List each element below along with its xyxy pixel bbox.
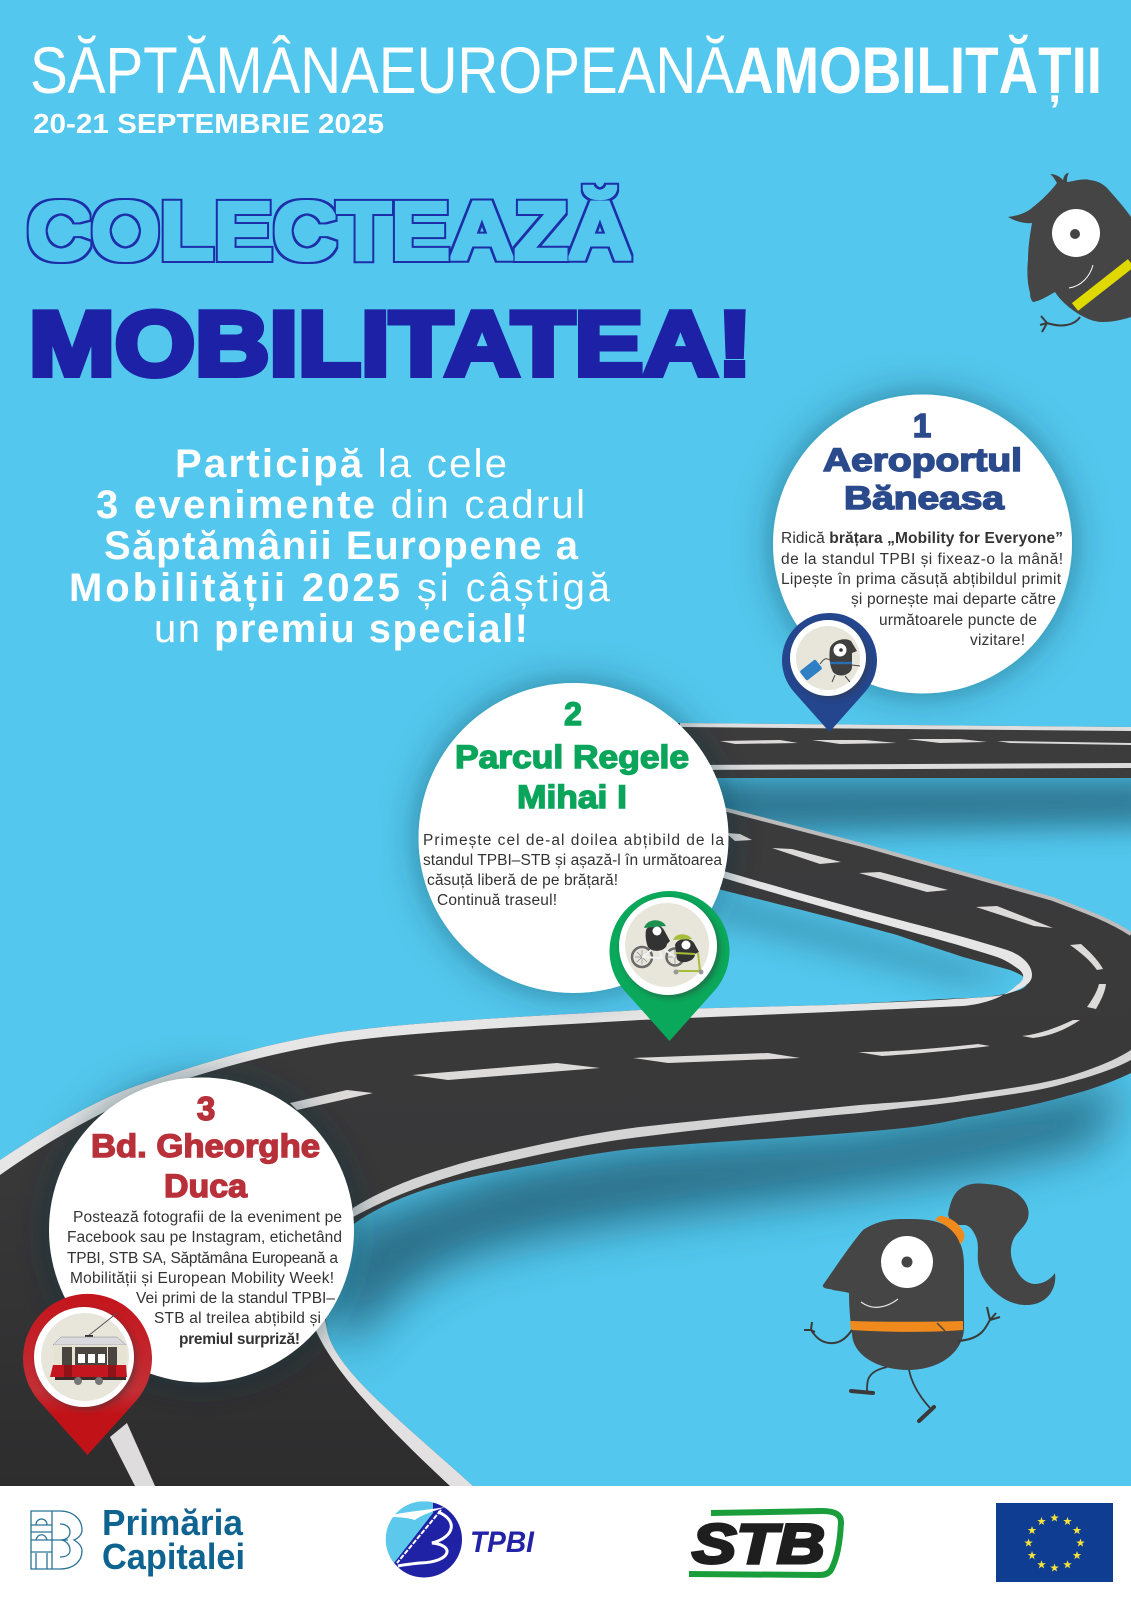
wordmark: Primăria: [102, 1502, 244, 1543]
intro paragraph: 3 evenimente din cadrul: [96, 483, 585, 527]
description: STB al treilea abțibild și: [154, 1310, 321, 1327]
footer band: [0, 1486, 1131, 1600]
description: următoarele puncte de: [879, 612, 1037, 629]
place name: Aeroportul: [823, 442, 1022, 478]
place name: Bd. Gheorghe: [91, 1128, 320, 1164]
pin with traveller mascot: [782, 613, 877, 732]
number: 3: [197, 1090, 215, 1127]
logo: Primăria Capitalei: [31, 1502, 245, 1577]
emblem: [31, 1511, 82, 1569]
place name: [823, 442, 1022, 516]
circle: [418, 683, 728, 993]
header title: SĂPTĂMÂNAEUROPEANĂ: [30, 33, 734, 107]
heading: Mobilitatea: MOBILITATEA!: [29, 294, 752, 395]
logo: TPBI: [386, 1501, 535, 1578]
intro paragraph: Participă la cele: [175, 442, 507, 486]
stop 2: Parcul Regele Mihai I: [418, 683, 730, 1041]
description: Primește cel de-al doilea abțibild de la: [423, 832, 724, 849]
intro paragraph: Mobilității 2025 și câștigă: [69, 566, 611, 610]
stop 3: Bd. Gheorghe Duca: [23, 1078, 354, 1455]
wordmark: STB: [692, 1512, 825, 1575]
shadows under road: [330, 778, 1131, 1350]
description: Postează fotografii de la eveniment pe: [73, 1209, 342, 1226]
date: 20-21 SEPTEMBRIE 2025: [33, 108, 384, 139]
description: Vei primi de la standul TPBI–: [136, 1290, 335, 1307]
place name: [91, 1128, 320, 1204]
pin with cyclists: [610, 891, 730, 1041]
mascot: bottom right with ponytail: [804, 1184, 1055, 1421]
pin with tram: [23, 1294, 152, 1455]
description: Ridică brățara „Mobility for Everyone”: [781, 530, 1063, 547]
wordmark: [102, 1502, 245, 1577]
description: [67, 1209, 342, 1348]
road surface: [0, 723, 1131, 1486]
mascot: top right with yellow belt: [1008, 173, 1131, 332]
description: Facebook sau pe Instagram, etichetând: [67, 1229, 342, 1246]
logo: EU flag: [996, 1503, 1113, 1582]
place name: Duca: [164, 1168, 247, 1204]
hair band: [935, 1216, 964, 1244]
place name: [455, 739, 689, 815]
description: premiul surpriză!: [179, 1331, 300, 1348]
intro paragraph: Săptămânii Europene a: [104, 524, 579, 568]
body: [823, 1219, 964, 1370]
circle: [49, 1078, 354, 1382]
description: căsuță liberă de pe brățară!: [427, 872, 618, 889]
description: de la standul TPBI și fixeaz-o la mână!: [781, 551, 1063, 568]
description: și pornește mai departe către: [851, 591, 1056, 608]
road edge lines: [0, 723, 1131, 1486]
description: standul TPBI–STB și așază-l în următoarea: [423, 852, 722, 869]
place name: Parcul Regele: [455, 739, 689, 775]
description: Continuă traseul!: [437, 892, 557, 909]
description: Mobilității și European Mobility Week!: [70, 1270, 334, 1287]
description: [423, 832, 724, 909]
circle: [773, 394, 1072, 694]
number: 2: [564, 696, 582, 732]
number: 1: [913, 407, 931, 444]
belt: [850, 1321, 963, 1332]
wordmark: TPBI: [470, 1526, 535, 1559]
intro paragraph: [69, 442, 611, 651]
logo: STB: [689, 1511, 841, 1575]
place name: Băneasa: [844, 480, 1004, 516]
ponytail: [948, 1184, 1055, 1305]
stop 1: Aeroportul Băneasa: [773, 394, 1072, 732]
description: TPBI, STB SA, Săptămâna Europeană a: [67, 1250, 338, 1267]
place name: Mihai I: [517, 779, 627, 815]
road: [0, 723, 1131, 1486]
intro paragraph: un premiu special!: [154, 607, 528, 651]
wordmark: Capitalei: [102, 1536, 245, 1577]
heading: Colectează: COLECTEAZĂ: [27, 186, 632, 277]
description: Lipește în prima căsuță abțibildul primit: [781, 571, 1062, 588]
road dashes: [290, 739, 1131, 1110]
description: [781, 530, 1063, 649]
arms and legs: [804, 1307, 1000, 1343]
description: vizitare!: [970, 632, 1025, 649]
